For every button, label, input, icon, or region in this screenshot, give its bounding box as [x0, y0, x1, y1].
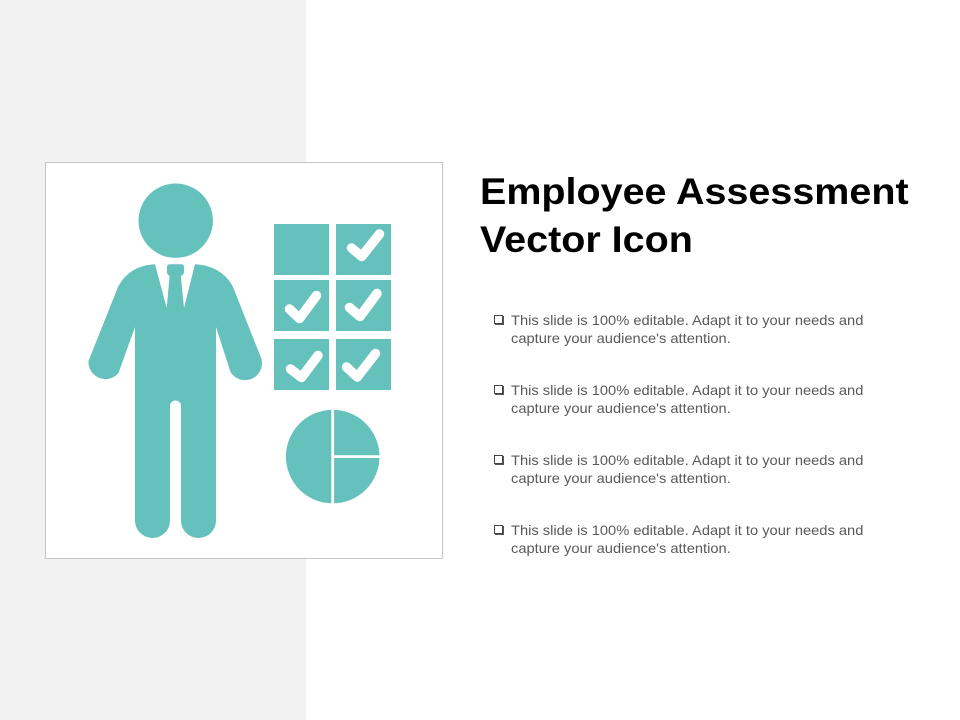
- bullet item 2: capture your audience's attention.: [511, 400, 731, 416]
- bullet item 2: This slide is 100% editable. Adapt it to your needs and: [511, 382, 863, 398]
- bullet item 4: This slide is 100% editable. Adapt it to your needs and: [511, 522, 863, 538]
- bullet item 4: capture your audience's attention.: [511, 540, 731, 556]
- bullet item 3: This slide is 100% editable. Adapt it to your needs and: [511, 452, 863, 468]
- bullet item 1: This slide is 100% editable. Adapt it to your needs and: [511, 312, 863, 328]
- panel: icon frame: [45, 162, 443, 559]
- bullet item 3: [494, 452, 863, 486]
- title: Vector Icon: [480, 219, 693, 260]
- bullet item 3: capture your audience's attention.: [511, 470, 731, 486]
- title: Employee Assessment: [480, 171, 909, 212]
- bullet list: [494, 312, 863, 556]
- bullet item 4: [494, 522, 863, 556]
- bullet item 1: capture your audience's attention.: [511, 330, 731, 346]
- icon: employee figure: [88, 184, 262, 538]
- bullet item 1: [494, 312, 863, 346]
- title: [480, 171, 909, 260]
- icon: checklist grid: [274, 224, 391, 390]
- left grey background band: [0, 0, 306, 720]
- bullet item 2: [494, 382, 863, 416]
- icon: pie chart: [286, 408, 381, 505]
